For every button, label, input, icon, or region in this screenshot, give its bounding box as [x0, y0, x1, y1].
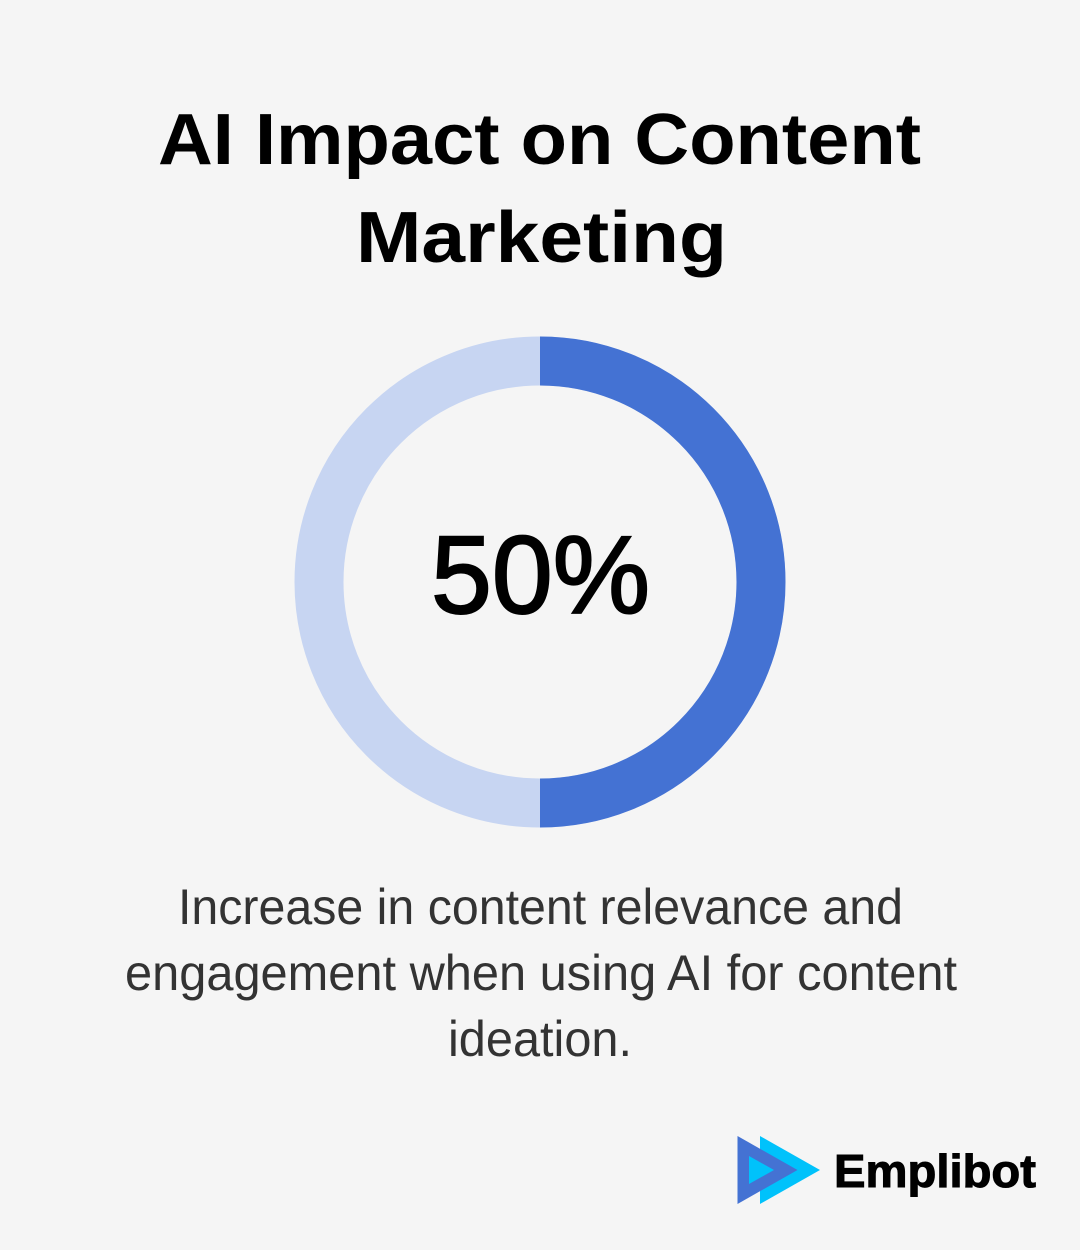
- description text: Increase in content relevance and: [178, 879, 903, 935]
- logo: Emplibot: [738, 1136, 1036, 1204]
- title: Marketing: [356, 198, 727, 278]
- icon: play triangles: [738, 1136, 820, 1204]
- logo wordmark: Emplibot: [834, 1145, 1036, 1197]
- description text: ideation.: [448, 1011, 632, 1067]
- title: AI Impact on Content: [158, 100, 921, 180]
- donut chart: 50%: [319, 361, 761, 803]
- description text: [125, 879, 957, 1067]
- title: [158, 100, 921, 278]
- donut value: 50%: [431, 514, 650, 637]
- description text: engagement when using AI for content: [125, 945, 957, 1001]
